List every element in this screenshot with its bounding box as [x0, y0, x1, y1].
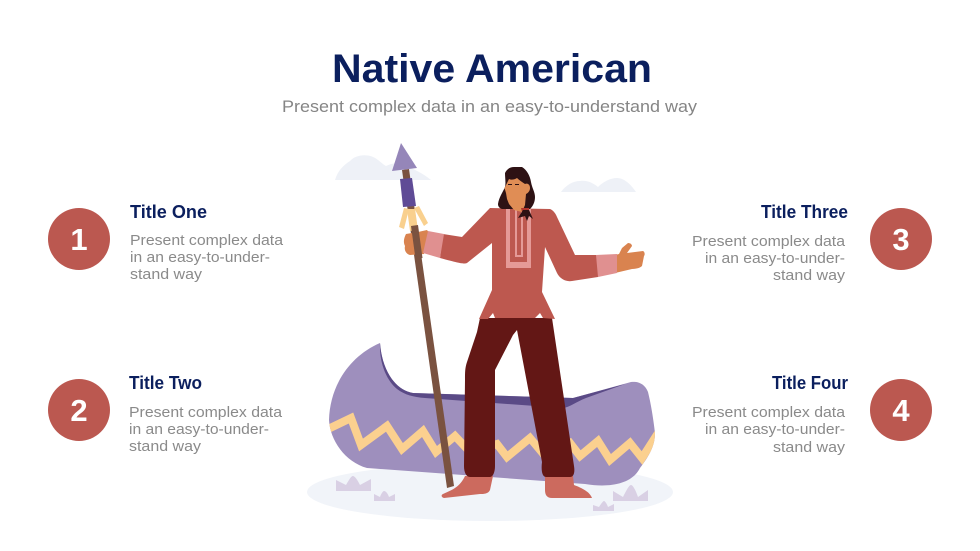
canoe zigzag pattern: [326, 418, 660, 460]
body text 1: Present complex data: [130, 232, 284, 249]
collar trim: [506, 208, 531, 268]
body text 4: Present complex data: [692, 404, 846, 421]
heading: Title One: Title One: [130, 202, 207, 222]
left foot: [442, 476, 493, 498]
item 4: [692, 373, 932, 456]
grass tufts: [336, 476, 648, 511]
body text 4: stand way: [773, 439, 846, 456]
body text 2: [129, 404, 283, 455]
item 3: [692, 202, 932, 284]
spear: [392, 143, 454, 488]
body text 3: Present complex data: [692, 233, 846, 250]
number badge 3: [870, 208, 932, 270]
right cuff: [596, 254, 617, 277]
number badge 1: 1: [70, 222, 88, 257]
cloud right: [561, 178, 636, 192]
body text 1: in an easy-to-under-: [130, 249, 270, 266]
body text 3: stand way: [773, 267, 846, 284]
heading: Title Four: Title Four: [772, 373, 848, 393]
body text 3: in an easy-to-under-: [705, 250, 845, 267]
spear head: [392, 143, 417, 171]
tunic: [440, 208, 598, 319]
item 1: [48, 202, 284, 283]
number badge 4: 4: [892, 393, 910, 428]
number badge 1: [48, 208, 110, 270]
body text 3: [692, 233, 846, 284]
heading: Title Three: Title Three: [761, 202, 848, 222]
eyes: [508, 184, 519, 185]
body text 2: in an easy-to-under-: [129, 421, 269, 438]
left cuff: [423, 231, 444, 258]
right foot: [545, 476, 592, 498]
number badge 2: 2: [70, 393, 88, 428]
left hand: [404, 230, 430, 255]
spear shaft over hand: [411, 225, 422, 259]
body text 2: stand way: [129, 438, 202, 455]
body text 1: stand way: [130, 266, 203, 283]
trousers: [464, 318, 574, 477]
number badge 2: [48, 379, 110, 441]
subtitle: Present complex data in an easy-to-understand way: [282, 97, 698, 116]
cloud left: [335, 155, 431, 180]
item 2: [48, 373, 283, 455]
hair tie: [518, 208, 533, 221]
body text 4: [692, 404, 846, 456]
face and neck: [504, 178, 530, 212]
heading: Title Two: Title Two: [129, 373, 202, 393]
body text 4: in an easy-to-under-: [705, 421, 845, 438]
spear shaft: [402, 169, 454, 488]
canoe: [326, 343, 660, 485]
spear binding: [400, 178, 416, 207]
body text 1: [130, 232, 284, 283]
illustration: native american man with spear and canoe: [307, 143, 673, 521]
ground shadow: [307, 463, 673, 521]
canoe inner rim: [380, 343, 625, 408]
number badge 4: [870, 379, 932, 441]
feathers: [399, 206, 428, 231]
hair: [498, 167, 535, 209]
number badge 3: 3: [892, 222, 910, 257]
title: Native American: [332, 47, 652, 91]
body text 2: Present complex data: [129, 404, 283, 421]
right hand: [615, 243, 645, 273]
